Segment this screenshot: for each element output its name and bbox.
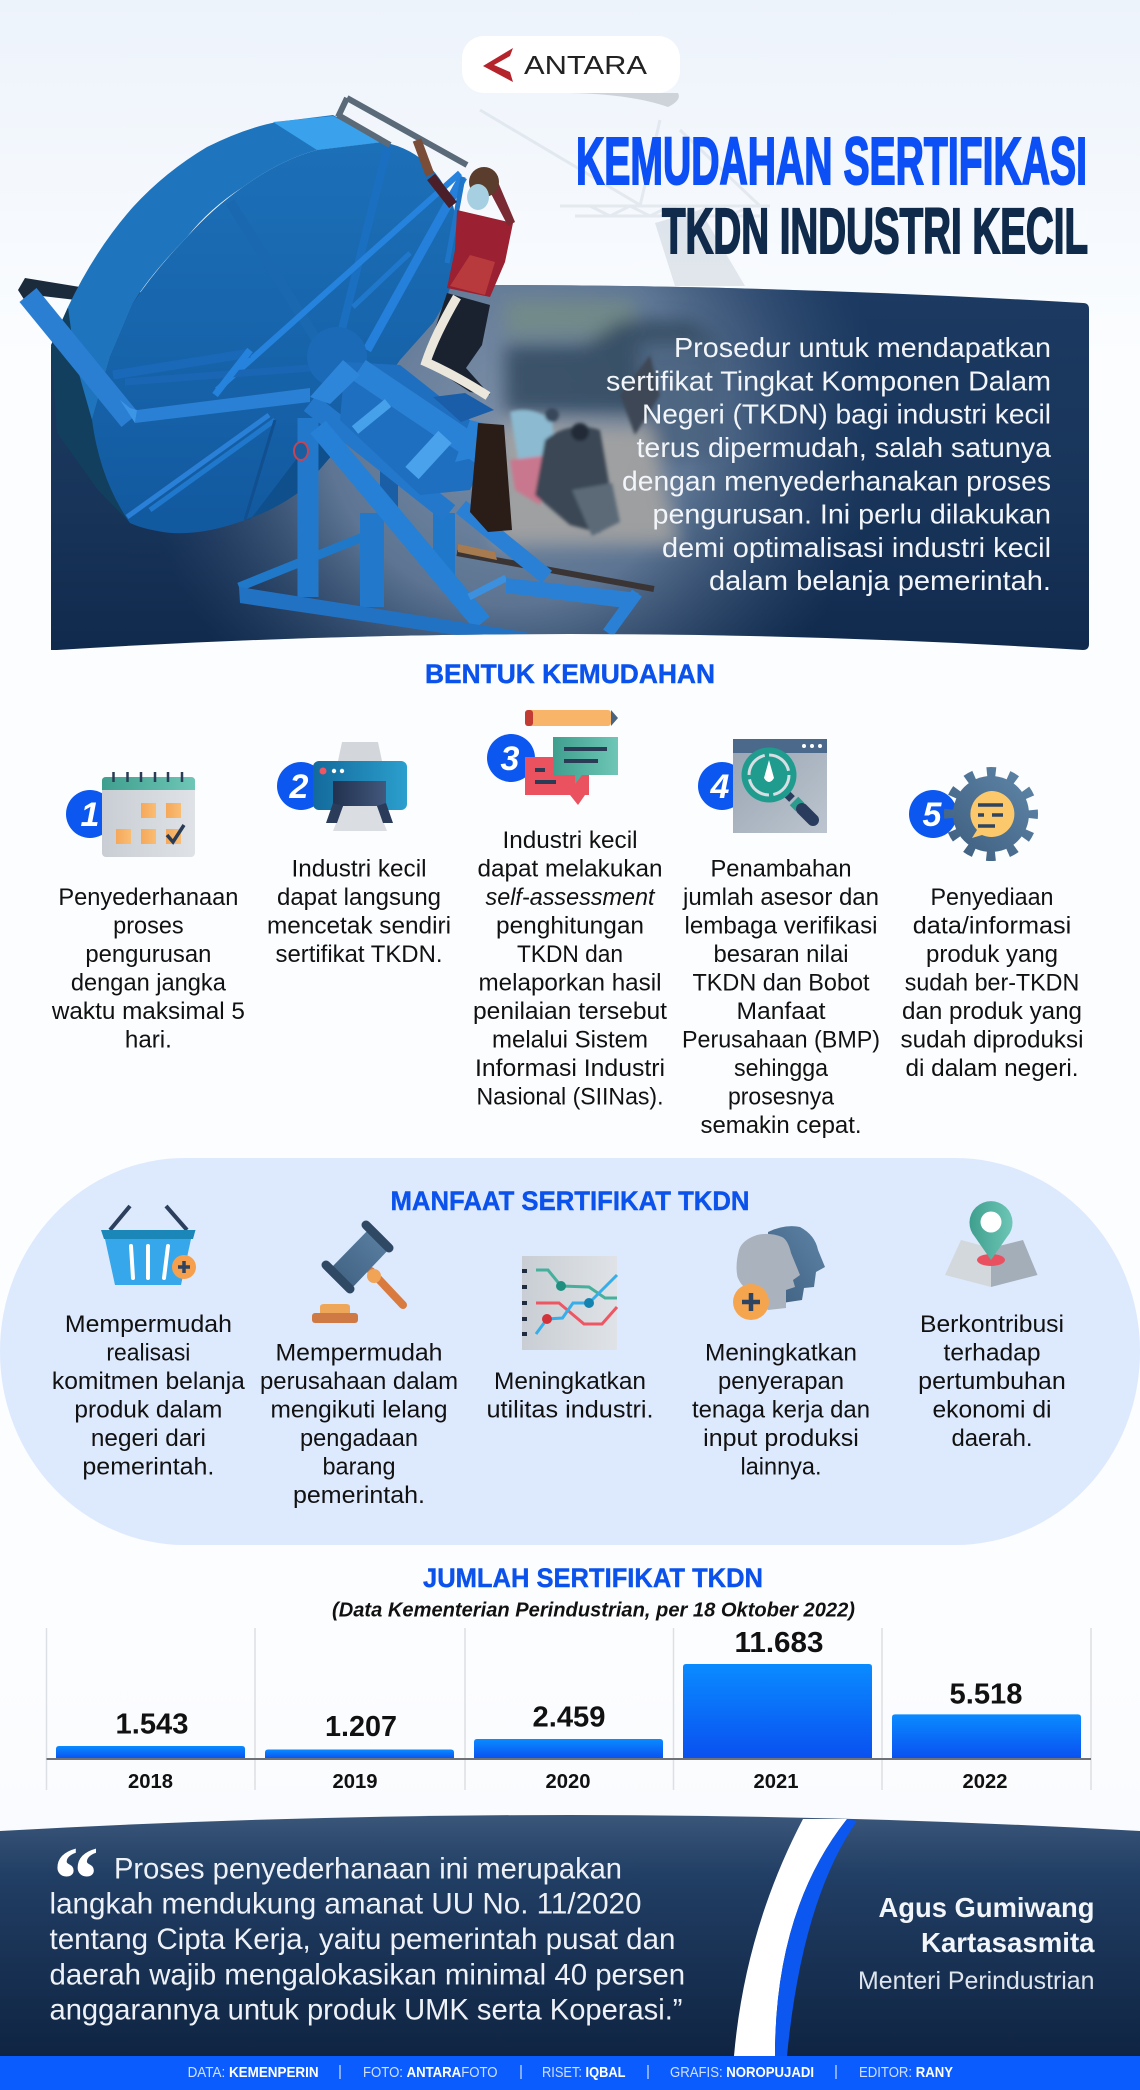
text: manfaat 5: daerah.: [952, 1425, 1032, 1452]
panel: quote: [0, 1815, 1140, 2056]
bar 2019: 1.207: [325, 1711, 397, 1743]
icon: heads with plus: [733, 1226, 825, 1320]
worker shoe: [458, 544, 497, 560]
text: item 1: proses: [113, 912, 184, 940]
text: item 2: mencetak sendiri: [267, 912, 451, 940]
text: manfaat 4: tenaga kerja dan: [692, 1396, 870, 1424]
worker lower leg: [470, 423, 512, 532]
text: item 4: Penambahan: [710, 856, 852, 883]
text: item 3: melaporkan hasil: [478, 970, 662, 996]
text: item 3: melalui Sistem: [492, 1026, 648, 1054]
badge 5: [909, 790, 957, 838]
white swoosh: [734, 1819, 847, 2056]
brown rail: [457, 553, 654, 589]
intro text: sertifikat Tingkat Komponen Dalam: [606, 365, 1051, 396]
intro text: dengan menyederhanakan proses: [622, 465, 1051, 496]
item 1: calendar icon: 1: [81, 796, 99, 834]
pencil: [525, 710, 611, 726]
grey top bar: [338, 98, 467, 165]
text: manfaat 1: [52, 1311, 246, 1480]
bar 2022: [892, 1678, 1081, 1793]
icon: antara chevron: [483, 48, 513, 82]
rear dark frame: [18, 278, 78, 300]
text: item 5: sudah diproduksi: [900, 1026, 1084, 1054]
intro text: pengurusan. Ini perlu dilakukan: [652, 498, 1051, 530]
main horizontal beam: [135, 388, 310, 423]
text: manfaat 4: [692, 1340, 870, 1480]
icon: line chart: [522, 1256, 617, 1350]
bar 2022: 5.518: [950, 1678, 1022, 1710]
quote text: Proses penyederhanaan ini merupakan: [114, 1853, 622, 1886]
raised arm: [417, 140, 430, 175]
speaker: Kartasasmita: [921, 1927, 1095, 1958]
red bubble: [525, 757, 589, 805]
panel base: [51, 285, 1089, 650]
disc face: [92, 142, 458, 533]
text: manfaat 2: pemerintah.: [293, 1482, 425, 1509]
item 2: printer icon: [277, 742, 407, 831]
text: item 2: dapat langsung: [277, 884, 441, 911]
bar 2020: [474, 1702, 663, 1793]
text: item 1: hari.: [125, 1026, 172, 1054]
title: [576, 124, 1088, 267]
text: manfaat 2: [260, 1340, 458, 1509]
worker trousers: [432, 293, 490, 395]
bar 2018: 1.543: [116, 1709, 188, 1741]
worker arm: [492, 184, 515, 226]
bar 2022: 2022: [962, 1771, 1008, 1793]
text: manfaat 1: realisasi: [106, 1340, 190, 1366]
hub: [307, 327, 367, 387]
text: manfaat 2: pengadaan: [300, 1425, 418, 1452]
disc rim highlight: [273, 116, 383, 150]
badge 4: [698, 762, 746, 810]
quote text: langkah mendukung amanat UU No. 11/2020: [50, 1888, 642, 1921]
bar 2021: [683, 1627, 872, 1793]
item 3: pencil and chat bubbles icon: [487, 710, 618, 805]
text: manfaat 5: ekonomi di: [932, 1396, 1052, 1424]
speaker: [858, 1892, 1095, 1995]
text: item 2: Industri kecil: [292, 856, 426, 883]
item 2: printer icon: 2: [289, 768, 309, 806]
text: item 5: sudah ber-TKDN: [905, 970, 1079, 996]
text: manfaat 4: lainnya.: [740, 1454, 822, 1480]
text: manfaat 5: pertumbuhan: [918, 1368, 1066, 1395]
text: item 1: dengan jangka: [71, 970, 227, 996]
text: manfaat 3: Meningkatkan: [494, 1368, 646, 1395]
text: manfaat 3: utilitas industri.: [486, 1396, 654, 1424]
text: manfaat 1: produk dalam: [74, 1396, 222, 1424]
intro text: terus dipermudah, salah satunya: [636, 432, 1051, 463]
bar 2021: 2021: [754, 1771, 798, 1793]
text: manfaat 1: pemerintah.: [82, 1454, 214, 1480]
item 5: gear icon: [909, 772, 1033, 856]
text: manfaat 1: komitmen belanja: [52, 1368, 246, 1395]
text: manfaat 5: Berkontribusi: [920, 1311, 1064, 1338]
text: manfaat 5: [918, 1311, 1066, 1452]
footer credits: [0, 2056, 1140, 2090]
pivot ring: [294, 442, 308, 460]
icon: map pin: [945, 1201, 1038, 1287]
speaker: Menteri Perindustrian: [858, 1967, 1094, 1995]
bar 2019: [265, 1711, 454, 1793]
text: manfaat 4: penyerapan: [718, 1368, 844, 1395]
text: manfaat 2: barang: [322, 1454, 396, 1480]
motor carriage: [340, 364, 474, 495]
text: item 4: Perusahaan (BMP): [682, 1026, 880, 1054]
text: item 5: di dalam negeri.: [906, 1055, 1078, 1082]
text: item 5: data/informasi: [913, 912, 1071, 940]
text: manfaat 1: negeri dari: [91, 1425, 206, 1452]
worker: [417, 140, 515, 560]
badge 3: [487, 734, 535, 782]
panel background: [0, 1158, 1140, 1545]
worker shirt: [447, 210, 513, 297]
disc back rim shadow: [51, 307, 130, 523]
item 3: pencil and chat bubbles icon: 3: [501, 740, 520, 778]
quote background: [0, 1815, 1140, 2056]
text: item 3: dapat melakukan: [478, 856, 662, 883]
bar 2018: 2018: [128, 1771, 173, 1793]
text: item 4: Manfaat: [736, 998, 826, 1025]
head and mask: [469, 167, 499, 197]
text: item 1: Penyederhanaan: [58, 884, 238, 911]
heading: bentuk kemudahan: BENTUK KEMUDAHAN: [425, 659, 715, 689]
footer credits: DATA: KEMENPERIN: [188, 2064, 319, 2081]
blue swoosh: [775, 1819, 857, 2056]
bar 2020: 2.459: [532, 1702, 606, 1734]
panel: manfaat sertifikat tkdn: [0, 1158, 1140, 1545]
text: item 3: Industri kecil: [502, 827, 638, 854]
text: item 5: [900, 884, 1084, 1082]
photo of workshop: [200, 285, 838, 640]
logo swoosh shadow: [570, 93, 679, 107]
text: manfaat 2: Mempermudah: [276, 1340, 442, 1366]
text: manfaat 1: Mempermudah: [65, 1311, 232, 1338]
intro text: Prosedur untuk mendapatkan: [674, 332, 1051, 363]
text: item 3: TKDN dan: [517, 941, 623, 968]
item 4: magnifier window icon: [698, 739, 827, 833]
text: item 4: jumlah asesor dan: [682, 884, 879, 911]
trouser stripe: [426, 297, 488, 396]
text: manfaat 2: mengikuti lelang: [270, 1396, 448, 1424]
text: item 4: [682, 856, 880, 1139]
bar 2018: [56, 1709, 245, 1793]
bar 2021: 11.683: [734, 1627, 824, 1659]
text: item 4: lembaga verifikasi: [684, 912, 878, 940]
badge 1: [66, 790, 114, 838]
intro text: demi optimalisasi industri kecil: [662, 532, 1051, 563]
quotation mark: “: [53, 1828, 99, 1930]
badge 2: [277, 762, 325, 810]
disc rim: [68, 115, 383, 420]
text: item 3: Nasional (SIINas).: [476, 1084, 664, 1110]
text: item 4: sehingga: [734, 1055, 829, 1082]
footer credits: EDITOR: RANY: [859, 2064, 953, 2081]
main long frame bar: [28, 295, 130, 420]
heading: manfaat: MANFAAT SERTIFIKAT TKDN: [390, 1186, 750, 1216]
text: item 4: semakin cepat.: [700, 1112, 862, 1139]
text: manfaat 4: input produksi: [703, 1425, 859, 1452]
intro text: dalam belanja pemerintah.: [709, 565, 1051, 596]
text: item 3: [473, 827, 667, 1110]
text: item 3: Informasi Industri: [475, 1055, 665, 1082]
intro text: [606, 332, 1051, 596]
icon: gavel: [312, 1225, 403, 1323]
text: manfaat 4: Meningkatkan: [705, 1340, 857, 1366]
support legs and frame: [239, 403, 637, 633]
text: item 1: pengurusan: [85, 941, 211, 968]
text: item 1: [51, 884, 245, 1054]
logo: [462, 36, 680, 107]
text: item 1: waktu maksimal 5: [51, 998, 245, 1025]
text: item 3: penilaian tersebut: [473, 998, 667, 1025]
quote text: anggarannya untuk produk UMK serta Koperasi.”: [50, 1994, 682, 2027]
calendar body: [102, 777, 195, 857]
footer credits: FOTO: ANTARAFOTO: [363, 2064, 498, 2081]
faint background truss structure: [480, 110, 770, 286]
text: item 3: penghitungan: [496, 912, 644, 940]
text: item 2: [267, 856, 451, 968]
machine and worker photo: [18, 98, 654, 637]
speaker: Agus Gumiwang: [878, 1892, 1094, 1923]
icon: basket: [101, 1206, 196, 1285]
footer credits: RISET: IQBAL: [542, 2064, 626, 2081]
bar 2020: 2020: [546, 1771, 590, 1793]
dark disc edge: [246, 444, 330, 520]
quote text: [50, 1853, 685, 2027]
panel: intro with photo background: [51, 270, 1089, 650]
footer credits: GRAFIS: NOROPUJADI: [670, 2064, 814, 2081]
text: manfaat 3: [486, 1368, 654, 1424]
item 1: calendar icon: [66, 772, 195, 857]
base beams: [239, 587, 530, 637]
item 4: magnifier window icon: 4: [710, 768, 730, 806]
text: item 4: besaran nilai: [714, 941, 848, 968]
teal bubble: [553, 737, 618, 784]
heading: jumlah sertifikat tkdn: JUMLAH SERTIFIKAT TKDN: [423, 1563, 763, 1593]
chart subtitle: (Data Kementerian Perindustrian, per 18 Oktober 2022): [332, 1600, 855, 1622]
quote text: tentang Cipta Kerja, yaitu pemerintah pusat dan: [50, 1923, 676, 1956]
text: item 3: self-assessment: [486, 884, 656, 911]
disc braces and struts: [113, 145, 463, 520]
bar chart: [46, 1627, 1091, 1793]
text: item 4: prosesnya: [728, 1084, 835, 1110]
text: manfaat 2: perusahaan dalam: [260, 1368, 458, 1395]
bar 2019: 2019: [332, 1771, 378, 1793]
text: item 4: TKDN dan Bobot: [692, 970, 870, 996]
logo pill: [462, 36, 680, 93]
logo wordmark: ANTARA: [524, 50, 648, 80]
text: item 5: produk yang: [926, 941, 1058, 968]
text: item 5: Penyediaan: [930, 884, 1054, 911]
text: item 5: dan produk yang: [902, 998, 1082, 1025]
item 5: gear icon: 5: [923, 796, 943, 834]
quote text: daerah wajib mengalokasikan minimal 40 persen: [50, 1959, 685, 1992]
intro text: Negeri (TKDN) bagi industri kecil: [642, 399, 1051, 430]
text: manfaat 5: terhadap: [944, 1340, 1040, 1366]
text: item 2: sertifikat TKDN.: [276, 941, 442, 968]
